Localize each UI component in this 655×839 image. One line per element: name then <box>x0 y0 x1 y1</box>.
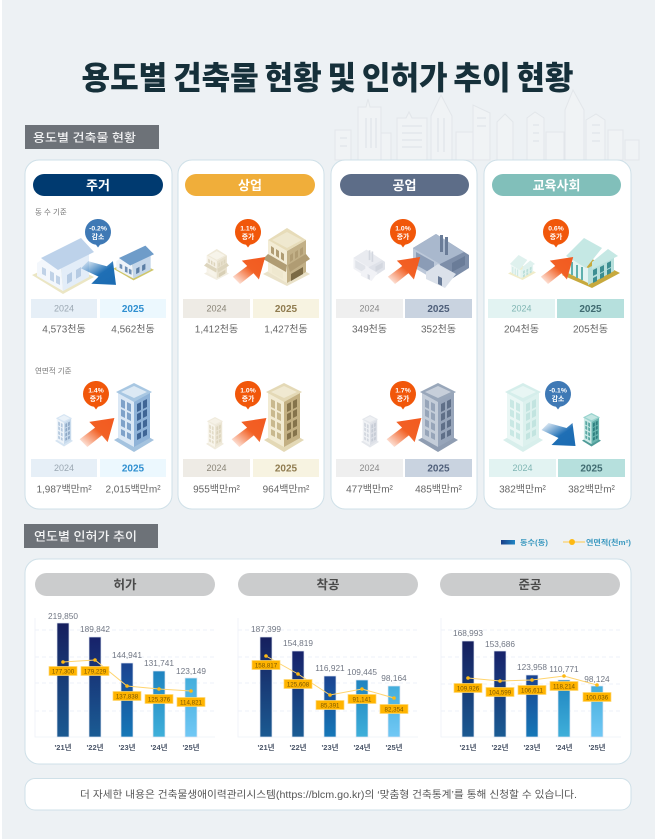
badge: -0.2% 감소: 감소 <box>92 232 104 241</box>
chart: 준공: 118,214 <box>553 683 576 690</box>
comparison: 연면적 <box>336 459 472 496</box>
comparison: 연면적: 382백만m² <box>568 484 616 496</box>
section heading: 용도별 건축물 현황: 용도별 건축물 현황 <box>33 130 136 144</box>
badge: 1.0% 증가: 1.0% <box>240 388 256 394</box>
basis label: 연면적 기준: 연면적 기준 <box>35 366 72 376</box>
icon: large house 2024 <box>32 238 94 294</box>
icon: small tower 2025 <box>582 413 601 447</box>
badge: 1.4% 증가 <box>83 381 109 410</box>
badge: 1.4% 증가: 증가 <box>90 394 103 403</box>
comparison: 동 수: 204천동 <box>504 324 539 336</box>
arrow: increase <box>387 418 421 447</box>
chart: 허가: 144,941 <box>112 650 142 660</box>
comparison: 동 수 <box>31 299 166 336</box>
comparison: 연면적: 382백만m² <box>499 484 547 496</box>
chart: 착공: '21년 <box>257 742 275 752</box>
icon: large tower 2025 <box>114 383 154 452</box>
comparison: 동 수 <box>183 299 319 336</box>
icon: large shop 2025 <box>263 228 310 286</box>
pill: 상업: 상업 <box>238 178 262 193</box>
arrow: decrease <box>542 423 576 446</box>
section heading: 용도별 건축물 현황 <box>25 125 159 149</box>
comparison: 연면적 <box>183 459 319 496</box>
chart: 착공: 착공 <box>316 577 340 592</box>
pill: 공업: 공업 <box>393 178 416 193</box>
comparison: 연면적: 2025 <box>580 464 603 474</box>
comparison: 연면적: 1,987백만m² <box>36 484 92 496</box>
chart: 준공: '22년 <box>491 742 509 752</box>
comparison: 연면적: 2024 <box>512 463 533 473</box>
basis label: 동 수 기준: 동 수 기준 <box>35 208 67 216</box>
chart: 허가: '24년 <box>150 742 168 752</box>
icon: small factory 2024 <box>354 250 385 281</box>
chart: 착공: 82,354 <box>385 706 404 713</box>
badge: 1.0% 증가 <box>235 381 261 410</box>
comparison: 동 수: 2025 <box>427 304 450 315</box>
icon: large tower 2024 <box>503 383 543 452</box>
panel: 교육사회 <box>484 160 631 509</box>
chart: 착공: 125,608 <box>287 681 310 688</box>
chart: 준공: 100,036 <box>586 694 609 701</box>
arrow: decrease <box>81 261 116 285</box>
badge: 1.7% 증가: 증가 <box>397 394 410 403</box>
arrow: increase <box>232 418 266 447</box>
chart: 허가: 177,300 <box>52 668 75 675</box>
title: 용도별 건축물 현황 및 인허가 추이 현황 <box>82 53 574 99</box>
comparison: 동 수: 2025 <box>275 304 298 315</box>
icon: large school 2025 <box>562 238 620 288</box>
chart: 허가: 123,149 <box>176 666 206 676</box>
comparison: 동 수: 352천동 <box>421 324 456 336</box>
comparison: 동 수 <box>336 299 472 336</box>
badge: 0.6% 증가 <box>543 219 569 248</box>
icon: large tower 2025 <box>418 383 458 452</box>
comparison: 연면적: 2024 <box>206 463 227 473</box>
badge: -0.1% 감소 <box>545 381 571 410</box>
comparison: 동 수: 2025 <box>122 304 145 315</box>
icon: small house 2025 <box>113 246 154 280</box>
comparison: 연면적: 964백만m² <box>263 484 310 496</box>
chart: 착공: 158,817 <box>255 662 278 669</box>
arrow: increase <box>388 257 420 284</box>
chart: 착공: 109,445 <box>347 667 377 677</box>
comparison: 동 수: 2024 <box>206 304 227 314</box>
pill: 주거: 주거 <box>86 178 110 193</box>
chart: 준공: '24년 <box>555 742 573 752</box>
comparison: 연면적: 485백만m² <box>415 484 463 496</box>
footer note: 더 자세한 내용은 건축물생애이력관리시스템(https://blcm.go.kr)의 ‘맞춤형 건축통계’를 통해 신청할 수 있습니다. <box>80 788 577 801</box>
icon: small tower 2024 <box>55 414 73 447</box>
badge: 1.0% 증가: 1.0% <box>395 226 411 232</box>
comparison: 동 수: 1,427천동 <box>264 324 308 336</box>
chart: 준공: 168,993 <box>453 628 483 638</box>
comparison: 동 수: 1,412천동 <box>195 324 238 336</box>
icon: large factory 2025 <box>413 234 469 288</box>
chart: 착공: '23년 <box>321 742 339 752</box>
chart: 허가: '23년 <box>118 742 136 752</box>
comparison: 연면적: 2025 <box>275 464 298 474</box>
comparison: 동 수 <box>488 299 624 336</box>
comparison: 동 수: 2024 <box>511 304 532 314</box>
legend: 연면적(천m²) <box>586 537 632 547</box>
badge: 1.4% 증가: 1.4% <box>88 388 104 394</box>
chart: 허가: '25년 <box>182 742 200 752</box>
pill: 상업 <box>185 174 315 196</box>
icon: small school 2024 <box>508 255 536 280</box>
chart: 준공: '21년 <box>459 742 477 752</box>
section heading: 연도별 인허가 추이 <box>24 524 158 548</box>
icon: small shop 2024 <box>204 249 229 280</box>
chart: 착공: 85,391 <box>321 702 340 709</box>
chart: 준공: 준공 <box>518 578 542 592</box>
chart: 착공: 98,164 <box>381 673 407 683</box>
chart: 준공: 123,958 <box>517 662 547 672</box>
arrow: increase <box>233 257 265 284</box>
badge: -0.2% 감소 <box>85 219 111 248</box>
comparison: 동 수: 349천동 <box>352 324 387 336</box>
icon: large tower 2025 <box>264 383 304 452</box>
badge: 1.0% 증가: 증가 <box>397 232 410 241</box>
comparison: 연면적: 955백만m² <box>193 484 241 496</box>
pill: 주거 <box>33 174 163 196</box>
comparison: 연면적: 2024 <box>359 463 380 473</box>
badge: 1.1% 증가: 1.1% <box>240 226 256 232</box>
badge: -0.2% 감소: -0.2% <box>89 226 107 232</box>
chart: 허가: 189,842 <box>80 624 110 634</box>
chart: 착공 <box>238 573 418 752</box>
comparison: 연면적: 2025 <box>427 464 450 474</box>
chart: 준공 <box>440 573 621 752</box>
chart: 허가: 137,838 <box>116 693 139 700</box>
chart: 허가: 125,376 <box>148 696 171 703</box>
arrow: increase <box>541 257 573 284</box>
comparison: 연면적: 2024 <box>54 463 74 473</box>
badge: 1.0% 증가: 증가 <box>242 394 255 403</box>
comparison: 동 수: 2024 <box>359 304 380 314</box>
icon: small tower 2024 <box>361 415 379 448</box>
chart: 허가 <box>35 573 215 752</box>
comparison: 연면적 <box>31 459 166 496</box>
panel: 주거 <box>25 160 172 509</box>
chart: 허가: '22년 <box>86 742 104 752</box>
chart: 허가: 131,741 <box>144 658 174 668</box>
chart: 착공: 154,819 <box>283 638 313 648</box>
panel: 공업 <box>331 160 477 509</box>
legend: 동수(동) <box>520 538 549 547</box>
chart: 허가: 허가 <box>113 577 137 592</box>
chart: 준공: 110,771 <box>549 664 579 674</box>
chart: 착공: 91,141 <box>353 696 372 703</box>
badge: 1.1% 증가: 증가 <box>242 232 255 241</box>
skyline background <box>335 90 639 160</box>
badge: -0.1% 감소: 감소 <box>552 394 564 403</box>
pill: 교육사회: 교육사회 <box>533 178 580 193</box>
chart: 준공: 109,926 <box>457 685 480 692</box>
section heading: 연도별 인허가 추이: 연도별 인허가 추이 <box>34 530 137 544</box>
panel: 연도별 인허가 추이 charts <box>25 559 631 764</box>
chart: 착공: 187,399 <box>251 624 281 634</box>
badge: -0.1% 감소: -0.1% <box>549 388 567 394</box>
chart: 준공: 98,124 <box>584 674 610 684</box>
badge: 0.6% 증가: 0.6% <box>548 226 564 232</box>
chart: 허가: '21년 <box>54 742 72 752</box>
comparison: 동 수: 2024 <box>54 304 74 314</box>
chart: 준공: 106,611 <box>521 687 544 694</box>
icon: small tower 2024 <box>206 417 224 450</box>
chart: 허가: 179,229 <box>84 668 107 675</box>
badge: 1.7% 증가 <box>390 381 416 410</box>
comparison: 동 수: 4,573천동 <box>42 324 86 336</box>
chart: 허가: 114,821 <box>180 699 203 706</box>
chart: 준공: 153,686 <box>485 639 515 649</box>
comparison: 연면적: 2,015백만m² <box>105 484 161 496</box>
chart: 착공: '22년 <box>289 742 307 752</box>
chart: 준공: '23년 <box>523 742 541 752</box>
chart: 착공: '24년 <box>353 742 371 752</box>
badge: 1.7% 증가: 1.7% <box>395 388 411 394</box>
chart: 준공: 104,599 <box>489 689 512 696</box>
comparison: 연면적: 2025 <box>122 464 145 474</box>
comparison: 동 수: 2025 <box>579 304 602 315</box>
chart: 준공: '25년 <box>588 742 606 752</box>
badge: 1.0% 증가 <box>390 219 416 248</box>
pill: 공업 <box>340 174 469 196</box>
comparison: 연면적: 477백만m² <box>346 484 394 496</box>
badge: 0.6% 증가: 증가 <box>550 232 563 241</box>
comparison: 동 수: 4,562천동 <box>111 324 155 336</box>
chart: 허가: 219,850 <box>48 611 78 621</box>
legend <box>501 537 632 547</box>
chart: 착공: 116,921 <box>315 663 345 673</box>
comparison: 연면적 <box>489 459 625 496</box>
comparison: 동 수: 205천동 <box>573 324 608 336</box>
chart: 착공: '25년 <box>385 742 403 752</box>
footer note <box>25 778 631 810</box>
panel: 상업 <box>178 160 324 509</box>
arrow: increase <box>80 418 114 447</box>
badge: 1.1% 증가 <box>235 219 261 248</box>
pill: 교육사회 <box>492 174 621 196</box>
